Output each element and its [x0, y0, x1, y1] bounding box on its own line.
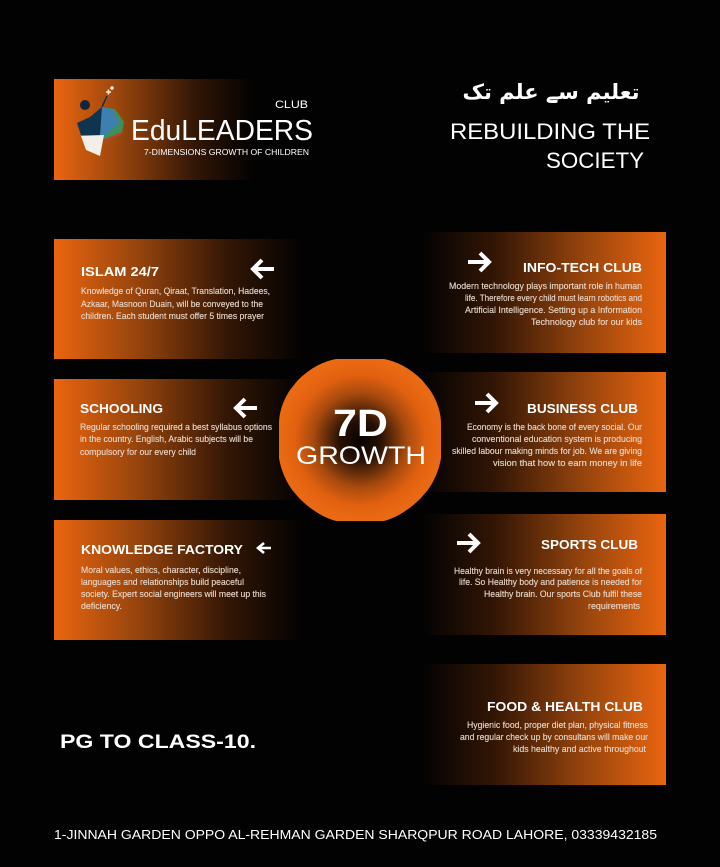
panel: Islam 24/7	[54, 239, 302, 359]
panel: Knowledge Factory: KNOWLEDGE FACTORY	[81, 543, 244, 557]
panel: Info-Tech Club: Artificial Intelligence. Setting up a Information	[465, 305, 642, 315]
panel: Schooling	[54, 379, 302, 500]
panel: Knowledge Factory: society. Expert social engineers will meet up this	[81, 589, 266, 599]
panel: Business Club: vision that how to earn money in life	[493, 458, 642, 468]
central badge: 7D growth: GROWTH	[296, 442, 426, 470]
panel: Food & Health Club: Hygienic food, proper diet plan, physical fitness	[467, 720, 648, 730]
panel: Info-Tech Club	[422, 232, 666, 353]
icon: right arrow	[457, 534, 478, 552]
panel: Islam 24/7: children. Each student must offer 5 times prayer	[81, 311, 264, 321]
panel: Islam 24/7: Azkaar, Masnoon Duain, will be conveyed to the	[81, 299, 263, 309]
panel: Business Club: skilled labour making minds for job. We are giving	[452, 446, 642, 456]
panel: Islam 24/7: Knowledge of Quran, Qiraat, Translation, Hadees,	[81, 286, 270, 296]
panel: Knowledge Factory	[54, 520, 302, 640]
brand name: EduLEADERS	[131, 115, 313, 147]
panel: Knowledge Factory: Moral values, ethics, character, discipline,	[81, 565, 241, 575]
panel: Knowledge Factory: deficiency.	[81, 601, 122, 611]
icon: left arrow	[258, 543, 271, 553]
panel: Business Club: conventional education system is producing	[472, 434, 642, 444]
heading: rebuilding the society	[450, 119, 650, 173]
panel: Food & Health Club: kids healthy and active throughout	[513, 744, 646, 754]
heading: rebuilding the society: SOCIETY	[546, 148, 644, 173]
panel: Sports Club: SPORTS CLUB	[541, 538, 638, 552]
heading: rebuilding the society: REBUILDING THE	[450, 119, 650, 144]
panel: logo banner	[54, 79, 313, 180]
panel: Info-Tech Club: Technology club for our kids	[531, 317, 642, 327]
panel: Schooling: compulsory for our every child	[80, 447, 196, 457]
panel: Sports Club: Healthy brain is very necessary for all the goals of	[454, 566, 642, 576]
panel: Sports Club: Healthy brain. Our sports Club fulfil these	[484, 589, 642, 599]
panel: Business Club: Economy is the back bone of every social. Our	[467, 422, 642, 432]
panel: Food & Health Club	[422, 664, 666, 785]
footer: address: 1-JINNAH GARDEN OPPO AL-REHMAN GARDEN SHARQPUR ROAD LAHORE, 03339432185	[54, 827, 657, 842]
panel: Knowledge Factory: languages and relationships build peaceful	[81, 577, 244, 587]
panel: Schooling: Regular schooling required a best syllabus options	[80, 422, 272, 432]
icon: right arrow	[468, 253, 489, 271]
panel: Food & Health Club: FOOD & HEALTH CLUB	[487, 700, 643, 714]
panel: Business Club	[422, 372, 666, 492]
panel: Sports Club	[422, 514, 666, 635]
central badge: 7D growth	[279, 359, 441, 521]
central badge: 7D growth: 7D	[333, 403, 388, 445]
panel: Islam 24/7: ISLAM 24/7	[81, 265, 159, 279]
panel: Food & Health Club: and regular check up by consultans will make our	[460, 732, 648, 742]
panel: Sports Club: requirements	[588, 601, 640, 611]
heading: urdu slogan: تعلیم سے علم تک	[462, 80, 640, 104]
label: club: CLUB	[275, 99, 308, 111]
icon: left arrow	[253, 260, 274, 278]
callout: PG to class-10: PG TO CLASS-10.	[60, 732, 256, 753]
panel: Schooling: in the country. English, Arabic subjects will be	[80, 434, 253, 444]
icon: right arrow	[475, 394, 496, 412]
panel: Sports Club: life. So Healthy body and patience is needed for	[459, 577, 642, 587]
panel: Info-Tech Club: Modern technology plays important role in human	[449, 281, 642, 291]
panel: Business Club: BUSINESS CLUB	[527, 402, 638, 416]
icon: EduLEADERS logo	[77, 86, 124, 156]
icon: left arrow	[236, 399, 257, 417]
panel: Info-Tech Club: INFO-TECH CLUB	[523, 261, 642, 275]
panel: Schooling: SCHOOLING	[80, 402, 163, 416]
panel: Info-Tech Club: life. Therefore every child must learn robotics and	[465, 293, 642, 303]
tagline: 7-DIMENSIONS GROWTH OF CHILDREN	[144, 148, 309, 157]
